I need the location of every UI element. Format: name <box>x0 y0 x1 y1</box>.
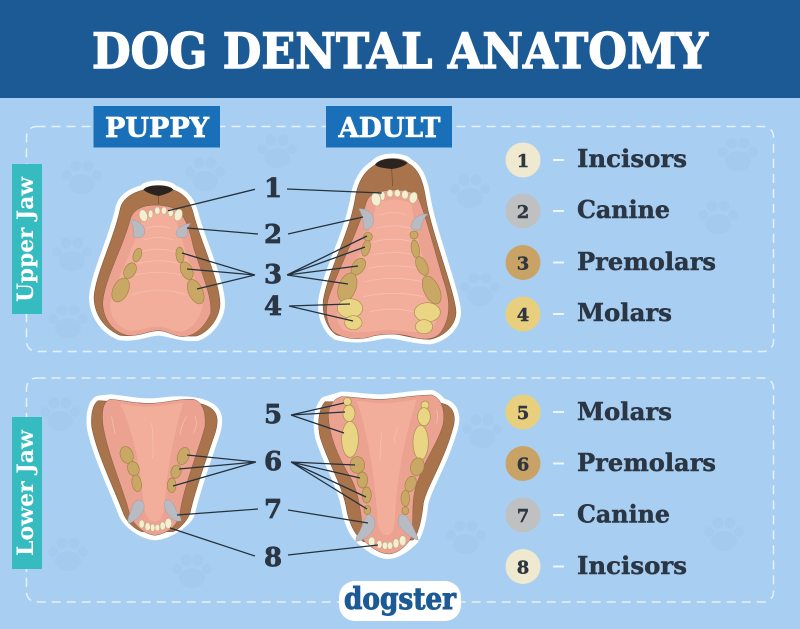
adult lower jaw illustration <box>319 395 454 554</box>
legend: upper jaw: 1 <box>517 151 529 172</box>
legend: upper jaw: Molars <box>577 298 672 327</box>
legend: lower jaw: 6 <box>517 454 529 476</box>
jaw number labels: 2 <box>264 220 282 250</box>
legend: lower jaw: Incisors <box>577 551 687 580</box>
jaw number labels: 6 <box>264 447 282 477</box>
jaw number labels: 8 <box>264 543 282 573</box>
jaw number labels: 7 <box>264 495 282 525</box>
legend: upper jaw: 4 <box>517 305 529 326</box>
heading: puppy: PUPPY <box>105 113 210 144</box>
jaw number labels: 1 <box>264 174 282 204</box>
adult upper jaw illustration <box>323 159 456 339</box>
legend: upper jaw: Incisors <box>577 144 687 173</box>
legend: lower jaw: Canine <box>577 500 670 528</box>
legend: lower jaw: 7 <box>517 506 529 527</box>
legend: upper jaw: 3 <box>517 254 529 274</box>
legend: upper jaw: Premolars <box>577 247 716 276</box>
dogster logo: dogster <box>344 582 457 617</box>
legend: upper jaw: 2 <box>517 202 529 223</box>
heading: puppy <box>94 106 220 148</box>
jaw number labels: 4 <box>264 292 282 322</box>
legend: upper jaw <box>506 142 716 332</box>
puppy lower jaw illustration <box>91 399 217 535</box>
puppy upper jaw illustration <box>94 185 220 337</box>
header band <box>0 0 800 98</box>
jaw number labels: 5 <box>264 400 282 430</box>
background paw prints <box>40 134 758 588</box>
title: DOG DENTAL ANATOMY <box>92 22 709 80</box>
label: lower jaw: Lower Jaw <box>13 429 39 556</box>
legend: lower jaw: Molars <box>577 397 672 426</box>
label: upper jaw: Upper Jaw <box>13 176 39 302</box>
jaw number labels <box>264 174 282 573</box>
legend: lower jaw <box>506 394 716 584</box>
heading: adult: ADULT <box>338 113 440 144</box>
legend: upper jaw: Canine <box>577 195 670 224</box>
legend: lower jaw: 5 <box>517 403 529 424</box>
heading: adult <box>326 106 452 148</box>
legend: lower jaw: 8 <box>517 558 529 578</box>
leader lines <box>168 189 382 556</box>
legend: lower jaw: Premolars <box>577 448 716 477</box>
panel: upper jaw frame <box>26 126 774 352</box>
jaw number labels: 3 <box>264 260 282 290</box>
panel: lower jaw frame <box>26 378 774 602</box>
